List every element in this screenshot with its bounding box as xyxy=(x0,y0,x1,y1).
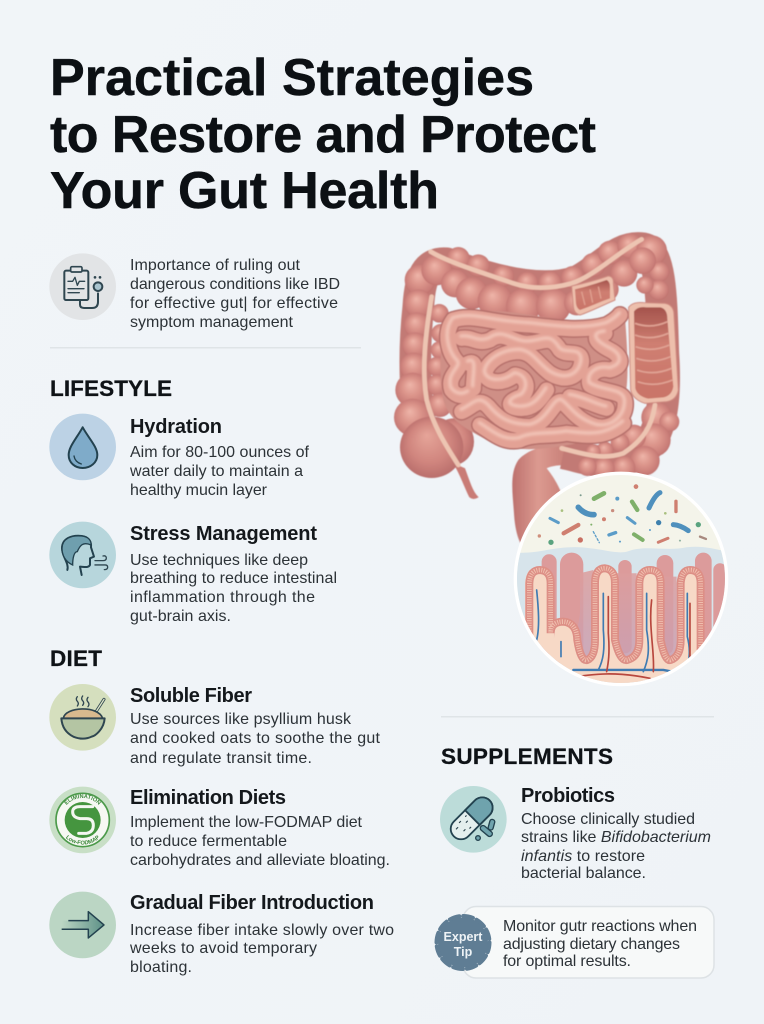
panel: soluble fiber xyxy=(49,684,381,767)
appendix xyxy=(453,463,479,499)
panel: elimination diets xyxy=(49,786,390,869)
tip box xyxy=(463,906,714,978)
icon: low-FODMAP badge: ELIMINATION xyxy=(64,794,101,805)
soluble fiber text: Use sources like psyllium husk xyxy=(130,711,352,728)
stress management text: Stress Management xyxy=(130,523,317,545)
gradual fiber text xyxy=(129,892,394,976)
soluble fiber text: and cooked oats to soothe the gut xyxy=(130,730,381,747)
panel: probiotics xyxy=(440,785,711,882)
colon base xyxy=(415,248,664,462)
badge: expert tip: Expert xyxy=(444,930,483,944)
colon bands xyxy=(424,239,655,465)
deep tissue xyxy=(550,570,677,663)
soluble fiber text: and regulate transit time. xyxy=(130,750,312,767)
gradual fiber text: Gradual Fiber Introduction xyxy=(130,892,374,914)
title: Your Gut Health xyxy=(50,162,439,220)
stress management text: breathing to reduce intestinal xyxy=(130,570,337,587)
intro text: dangerous conditions like IBD xyxy=(130,276,340,293)
elimination diets text: Elimination Diets xyxy=(130,787,286,809)
gradual fiber text: weeks to avoid temporary xyxy=(129,940,317,957)
panel: hydration xyxy=(49,414,310,499)
icon: water drop xyxy=(49,414,116,480)
probiotics text: strains like Bifidobacterium xyxy=(521,829,711,846)
cutaway: transverse colon window xyxy=(572,276,615,315)
elimination diets text: Implement the low-FODMAP diet xyxy=(130,814,363,831)
tip text: for optimal results. xyxy=(503,953,631,970)
title: Practical Strategies xyxy=(50,49,534,107)
probiotics text: bacterial balance. xyxy=(521,865,646,882)
title xyxy=(50,49,596,220)
intro text: for effective gut| for effective xyxy=(130,295,338,312)
probiotics text xyxy=(521,785,711,882)
rectum xyxy=(512,444,587,545)
villi lining xyxy=(525,569,697,683)
icon: head breathing xyxy=(49,522,116,588)
callout: expert tip xyxy=(436,906,714,978)
intro text xyxy=(130,257,340,331)
back villi xyxy=(542,553,727,659)
gradual fiber text: bloating. xyxy=(130,959,192,976)
illustration: intestines xyxy=(394,233,679,545)
probiotics text: Probiotics xyxy=(521,785,615,807)
icon: oat bowl xyxy=(49,684,116,751)
cutaway: descending colon window xyxy=(629,303,678,403)
tip text xyxy=(503,918,697,970)
soluble fiber text: Soluble Fiber xyxy=(130,685,252,707)
badge: expert tip xyxy=(436,916,490,969)
icon: low-FODMAP badge: Low-FODMAP xyxy=(66,835,98,845)
icon: low-FODMAP badge xyxy=(49,786,116,854)
title: to Restore and Protect xyxy=(50,106,596,164)
badge: expert tip: Tip xyxy=(454,945,473,959)
bacteria xyxy=(550,493,706,543)
hydration text: healthy mucin layer xyxy=(130,482,268,499)
cecum xyxy=(433,418,474,465)
mucus layer xyxy=(517,546,725,683)
stress management text: gut-brain axis. xyxy=(130,608,231,625)
probiotics text: Choose clinically studied xyxy=(521,811,695,828)
blood vessels xyxy=(536,589,691,679)
heading: lifestyle: LIFESTYLE xyxy=(50,376,172,401)
tip text: adjusting dietary changes xyxy=(503,936,680,953)
hydration text: Aim for 80-100 ounces of xyxy=(130,444,310,461)
stress management text: inflammation through the xyxy=(130,589,315,606)
gradual fiber text: Increase fiber intake slowly over two xyxy=(130,922,394,939)
icon: probiotic capsule xyxy=(440,786,507,853)
small intestine xyxy=(440,311,628,449)
panel: medical intro xyxy=(49,253,340,331)
panel: gradual fiber introduction xyxy=(49,892,394,976)
panel: stress management xyxy=(49,522,337,625)
icon: clipboard and stethoscope xyxy=(49,253,116,320)
elimination diets text: carbohydrates and alleviate bloating. xyxy=(130,852,390,869)
elimination diets text: to reduce fermentable xyxy=(130,833,287,850)
inset: microbiome and intestinal lining xyxy=(510,470,733,693)
haustra circles xyxy=(394,233,679,479)
intro text: symptom management xyxy=(130,314,294,331)
icon: arrow xyxy=(49,892,116,958)
probiotics text: infantis to restore xyxy=(521,848,645,865)
soluble fiber text xyxy=(130,685,381,767)
intro text: Importance of ruling out xyxy=(130,257,301,274)
stress management text: Use techniques like deep xyxy=(130,552,308,569)
tip text: Monitor gutr reactions when xyxy=(503,918,697,935)
heading: diet: DIET xyxy=(50,646,102,671)
hydration text: water daily to maintain a xyxy=(129,463,303,480)
elimination diets text xyxy=(130,787,390,869)
hydration text xyxy=(129,416,310,499)
hydration text: Hydration xyxy=(130,416,222,438)
heading: supplements: SUPPLEMENTS xyxy=(441,744,613,769)
stress management text xyxy=(130,523,337,625)
